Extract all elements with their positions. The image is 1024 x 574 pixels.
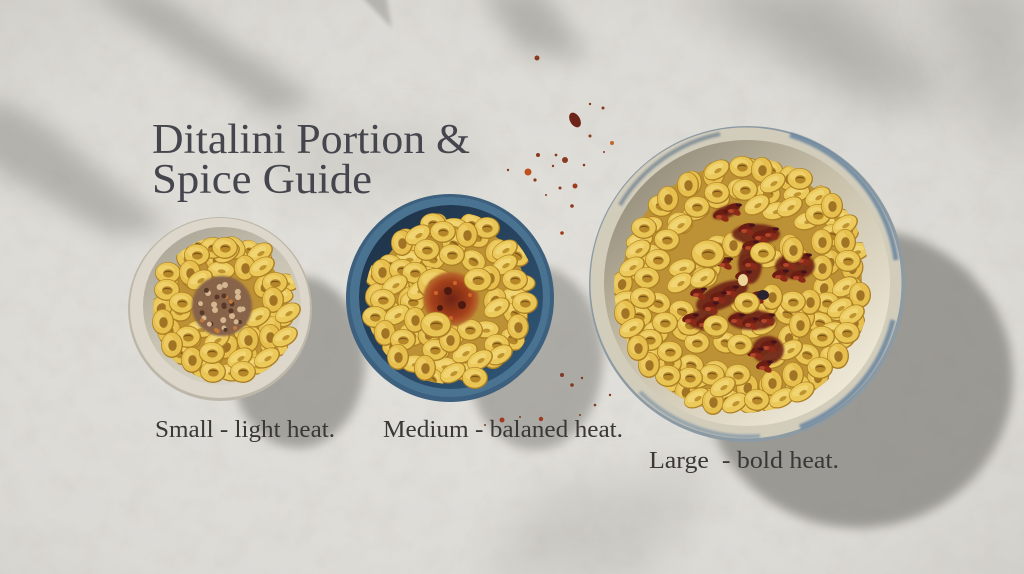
label: small bowl: Small - light heat. bbox=[155, 417, 335, 443]
large bowl chili flakes bbox=[681, 201, 815, 374]
small bowl bbox=[128, 217, 312, 401]
label: medium bowl: Medium - balaned heat. bbox=[383, 417, 623, 443]
label: large bowl: Large - bold heat. bbox=[649, 448, 839, 474]
large bowl bbox=[586, 126, 905, 445]
bowl shadows bbox=[231, 228, 1013, 528]
scattered chili flakes bbox=[484, 56, 614, 426]
title: Ditalini Portion & bbox=[152, 117, 470, 163]
small bowl spice topping bbox=[187, 272, 255, 341]
large bowl pasta bbox=[614, 156, 871, 415]
small bowl pasta bbox=[152, 236, 301, 383]
medium bowl bbox=[346, 194, 554, 402]
medium bowl spice topping bbox=[417, 268, 492, 338]
title: Spice Guide bbox=[152, 157, 372, 203]
medium bowl pasta bbox=[362, 213, 538, 389]
title bbox=[152, 117, 470, 203]
